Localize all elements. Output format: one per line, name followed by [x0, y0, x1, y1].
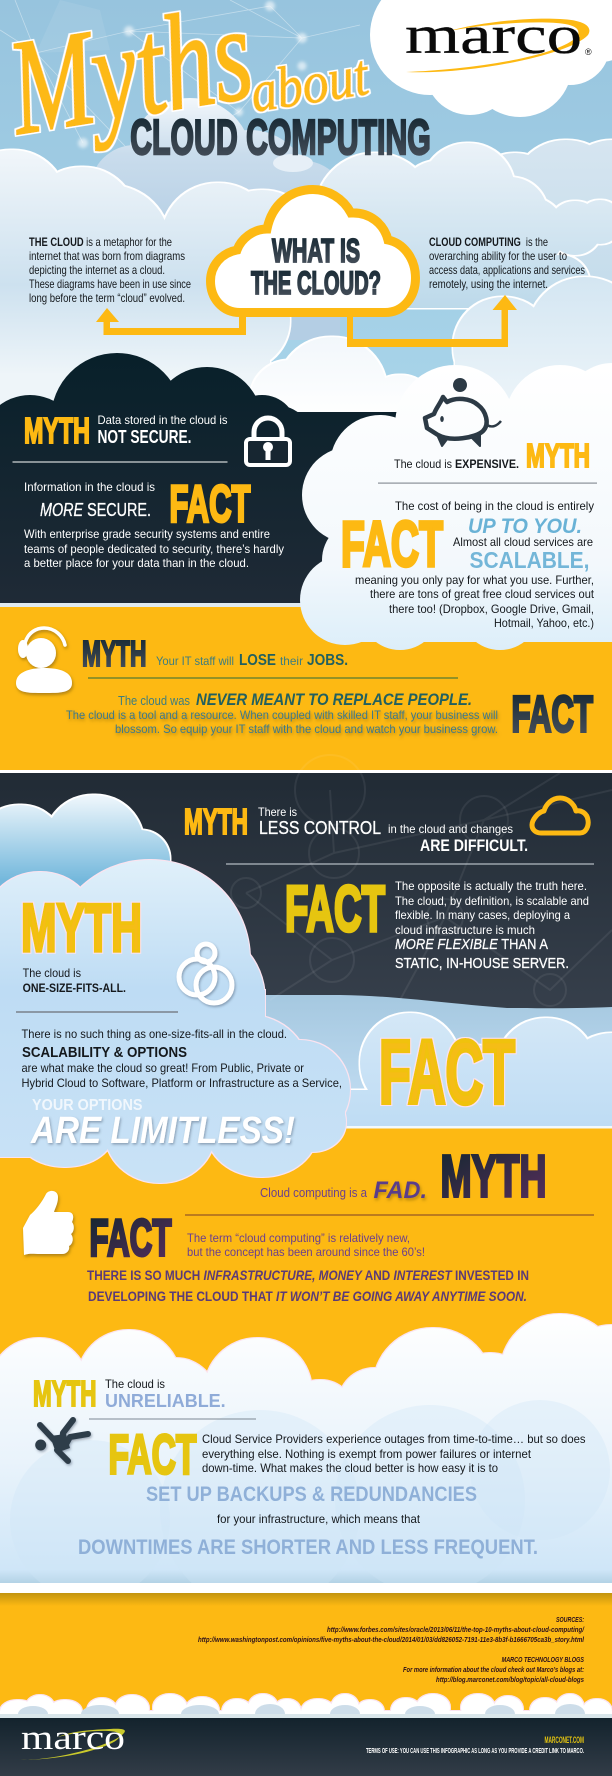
fact paragraph: flexible: The opposite is actually the truth here.	[395, 879, 587, 893]
fact paragraph: outages: Cloud Service Providers experience outages from time-to-time… but so does	[202, 1432, 586, 1446]
panel: unreliable clouds	[0, 1314, 612, 1610]
myth text: less control: ARE DIFFICULT.	[420, 836, 528, 855]
fact paragraph: scalability: SCALABILITY & OPTIONS	[22, 1044, 187, 1061]
callout: downtimes: DOWNTIMES ARE SHORTER AND LESS FREQUENT.	[78, 1536, 538, 1559]
text: cloud computing definition	[429, 235, 585, 291]
panel: expensive white cloud	[300, 363, 612, 650]
fact paragraph: flexible: The cloud, by definition, is scalable and	[395, 894, 589, 908]
myth label: MYTH	[33, 1373, 96, 1414]
fact text: never replace people: The cloud is a tool and a resource. When coupled with skilled IT staff, your business will	[66, 708, 498, 722]
foreground cloud lower right	[453, 277, 612, 420]
fact text: never replace people: NEVER MEANT TO REPLACE PEOPLE.	[196, 690, 472, 709]
fact paragraph: outages	[202, 1432, 586, 1475]
myth text: one size: ONE-SIZE-FITS-ALL.	[23, 981, 126, 995]
fact text: more secure	[24, 480, 155, 520]
fact label: FACT	[285, 872, 385, 945]
panel: yellow IT staff background	[0, 603, 612, 772]
sources text: SOURCES:	[556, 1615, 584, 1624]
myth text: fad: FAD.	[374, 1177, 427, 1204]
fact paragraph: security: With enterprise grade security systems and entire	[24, 527, 270, 541]
sources text: MARCO TECHNOLOGY BLOGS	[502, 1655, 584, 1664]
arrow right	[347, 295, 517, 347]
text: the cloud definition: depicting the internet as a cloud.	[29, 263, 165, 277]
fact text: up to you: The cost of being in the cloud is entirely	[395, 499, 594, 513]
fact paragraph: flexible: MORE FLEXIBLE THAN A	[395, 936, 548, 953]
panel: less control dark section	[0, 773, 612, 1008]
fact paragraph: flexible	[395, 879, 589, 972]
fact label: FACT	[341, 508, 443, 580]
myth label: MYTH	[184, 801, 248, 842]
logo cloud	[370, 0, 612, 117]
fact paragraph: scalability	[22, 1027, 342, 1090]
icon: piggy bank	[425, 378, 501, 446]
fact text: never replace people: The cloud was	[118, 694, 190, 708]
sources text	[198, 1615, 585, 1684]
text: the cloud definition: long before the term “cloud” evolved.	[29, 291, 185, 305]
myth text: one size: The cloud is	[23, 966, 81, 980]
icon: cloud outline	[532, 798, 588, 833]
fact text: concept since the 60s	[87, 1231, 529, 1304]
callout: your options are limitless	[30, 1097, 295, 1152]
panel: secure dark cloud	[0, 353, 400, 603]
fact text: up to you: there are tons of great free cloud services out	[370, 587, 595, 601]
fact label big: FACT	[379, 1023, 515, 1123]
sky background	[0, 0, 612, 420]
callout: your options are limitless: YOUR OPTIONS	[32, 1097, 142, 1114]
logo registered mark: ®	[585, 47, 592, 57]
myth text: lose jobs	[156, 652, 348, 669]
fact paragraph: scalability: Hybrid Cloud to Software, Platform or Infrastructure as a Service,	[22, 1076, 342, 1090]
myth text: fad	[260, 1177, 427, 1204]
fact paragraph: security: teams of people dedicated to security, there’s hardly	[24, 542, 284, 556]
fact text: concept since the 60s: THERE IS SO MUCH INFRASTRUCTURE, MONEY AND INTEREST INVESTED IN	[87, 1267, 529, 1283]
panel: footer	[0, 1718, 612, 1776]
text: cloud computing definition: overarching ability for the user to	[429, 249, 567, 263]
fact label: FACT	[170, 476, 251, 534]
fact text: concept since the 60s: DEVELOPING THE CLOUD THAT IT WON’T BE GOING AWAY ANYTIME SOON.	[88, 1288, 527, 1304]
fact text: more secure: MORE SECURE.	[40, 500, 151, 520]
icon: headset person	[16, 628, 72, 693]
footer logo: marco	[21, 1718, 125, 1757]
myth text: less control	[258, 805, 528, 855]
icon: lock	[246, 418, 290, 465]
fact label: FACT	[90, 1210, 172, 1268]
myth text: unreliable: UNRELIABLE.	[105, 1391, 226, 1411]
myth text: less control: There is	[258, 805, 297, 819]
myth text: lose jobs: JOBS.	[307, 652, 348, 669]
upper cloud back layer	[0, 795, 172, 904]
myth label: MYTH	[82, 633, 146, 674]
network pattern	[231, 755, 612, 1006]
text: the cloud definition: These diagrams have been in use since	[29, 277, 191, 291]
myth text: unreliable	[105, 1377, 226, 1411]
icon: thumbs up	[23, 1191, 74, 1255]
fact text: up to you: UP TO YOU.	[468, 515, 582, 538]
fact text: up to you: meaning you only pay for what you use. Further,	[355, 573, 594, 587]
background clouds centre right	[315, 143, 612, 315]
background clouds far right	[473, 140, 612, 315]
fact text: concept since the 60s: The term “cloud computing” is relatively new,	[187, 1231, 410, 1245]
heading what is: WHAT IS	[272, 232, 360, 269]
myth text: one size	[23, 966, 126, 995]
foreground cloud lower middle	[250, 337, 435, 447]
text: cloud computing definition: remotely, using the internet.	[429, 277, 548, 291]
fact text: up to you	[355, 499, 595, 630]
myth text: lose jobs: LOSE	[239, 652, 276, 669]
fact text: up to you: there too! (Dropbox, Google Drive, Gmail,	[389, 602, 594, 616]
fact text: more secure: Information in the cloud is	[24, 480, 155, 494]
panel: fad yellow background	[0, 1128, 612, 1428]
fact paragraph: scalability: are what make the cloud so great! From Public, Private or	[22, 1061, 304, 1075]
fact paragraph: security	[24, 527, 284, 570]
myth text: not secure: NOT SECURE.	[98, 427, 192, 447]
myth text: expensive: The cloud is EXPENSIVE.	[394, 457, 519, 471]
fact text: never replace people: blossom. So equip your IT staff with the cloud and watch your business grow.	[115, 722, 498, 736]
myth label: MYTH	[440, 1144, 546, 1210]
myth label big: MYTH	[21, 890, 142, 966]
title: about: about	[246, 42, 374, 125]
myth text: unreliable: The cloud is	[105, 1377, 165, 1391]
band behind fact cloud	[0, 985, 612, 1130]
fact paragraph: scalability: There is no such thing as one-size-fits-all in the cloud.	[22, 1027, 287, 1041]
text: infrastructure line: for your infrastructure, which means that	[217, 1512, 421, 1526]
fact cloud	[340, 1013, 612, 1135]
panel: sources yellow band	[0, 1593, 612, 1718]
logo wordmark: marco	[405, 5, 582, 65]
arrow left	[96, 308, 246, 335]
fact text: never replace people	[66, 690, 498, 736]
text: the cloud definition: THE CLOUD is a metaphor for the	[29, 235, 172, 249]
text: the cloud definition	[29, 235, 191, 305]
background cloud behind title	[90, 98, 350, 340]
fact paragraph: security: a better place for your data than in the cloud.	[24, 556, 249, 570]
myth text: fad: Cloud computing is a	[260, 1186, 367, 1200]
cloud border strip	[0, 1694, 612, 1725]
icon: linked rings	[179, 944, 232, 1003]
background clouds left	[0, 150, 317, 420]
myth label: MYTH	[24, 410, 90, 451]
fact text: up to you: Hotmail, Yahoo, etc.)	[494, 616, 594, 630]
callout: backups and redundancies: SET UP BACKUPS & REDUNDANCIES	[146, 1483, 477, 1506]
title: cloud computing: CLOUD COMPUTING	[130, 111, 431, 165]
fact label: FACT	[108, 1422, 196, 1486]
fact paragraph: flexible: cloud infrastructure is much	[395, 923, 535, 937]
fact paragraph: flexible: flexible. In many cases, deploying a	[395, 908, 570, 922]
text: cloud computing definition: CLOUD COMPUTING is the	[429, 235, 548, 249]
icon: falling person	[35, 1420, 88, 1461]
network lines in sky	[0, 0, 360, 171]
logo swoosh	[406, 19, 589, 72]
heading the cloud: THE CLOUD?	[251, 265, 381, 301]
what is the cloud badge	[210, 190, 416, 312]
panel: one-size-fits-all cloud	[0, 860, 350, 1183]
myth text: less control: LESS CONTROL	[259, 818, 381, 838]
fact paragraph: flexible: STATIC, IN-HOUSE SERVER.	[395, 955, 569, 972]
myth text: not secure	[98, 413, 228, 447]
text: the cloud definition: internet that was born from diagrams	[29, 249, 185, 263]
fact text: up to you: SCALABLE,	[470, 547, 590, 573]
myth text: less control: in the cloud and changes	[388, 822, 513, 836]
fact text: concept since the 60s: but the concept has been around since the 60’s!	[187, 1245, 425, 1259]
fact text: up to you: Almost all cloud services are	[453, 535, 593, 549]
fact paragraph: outages: down-time. What makes the cloud better is how easy it is to	[202, 1461, 498, 1475]
myth text: lose jobs: their	[280, 654, 303, 668]
myth text: lose jobs: Your IT staff will	[156, 654, 234, 668]
callout: your options are limitless: ARE LIMITLESS!	[30, 1110, 295, 1152]
myth text: not secure: Data stored in the cloud is	[98, 413, 228, 427]
fact paragraph: outages: everything else. Nothing is exempt from power failures or internet	[202, 1447, 532, 1461]
white divider	[0, 1583, 612, 1593]
